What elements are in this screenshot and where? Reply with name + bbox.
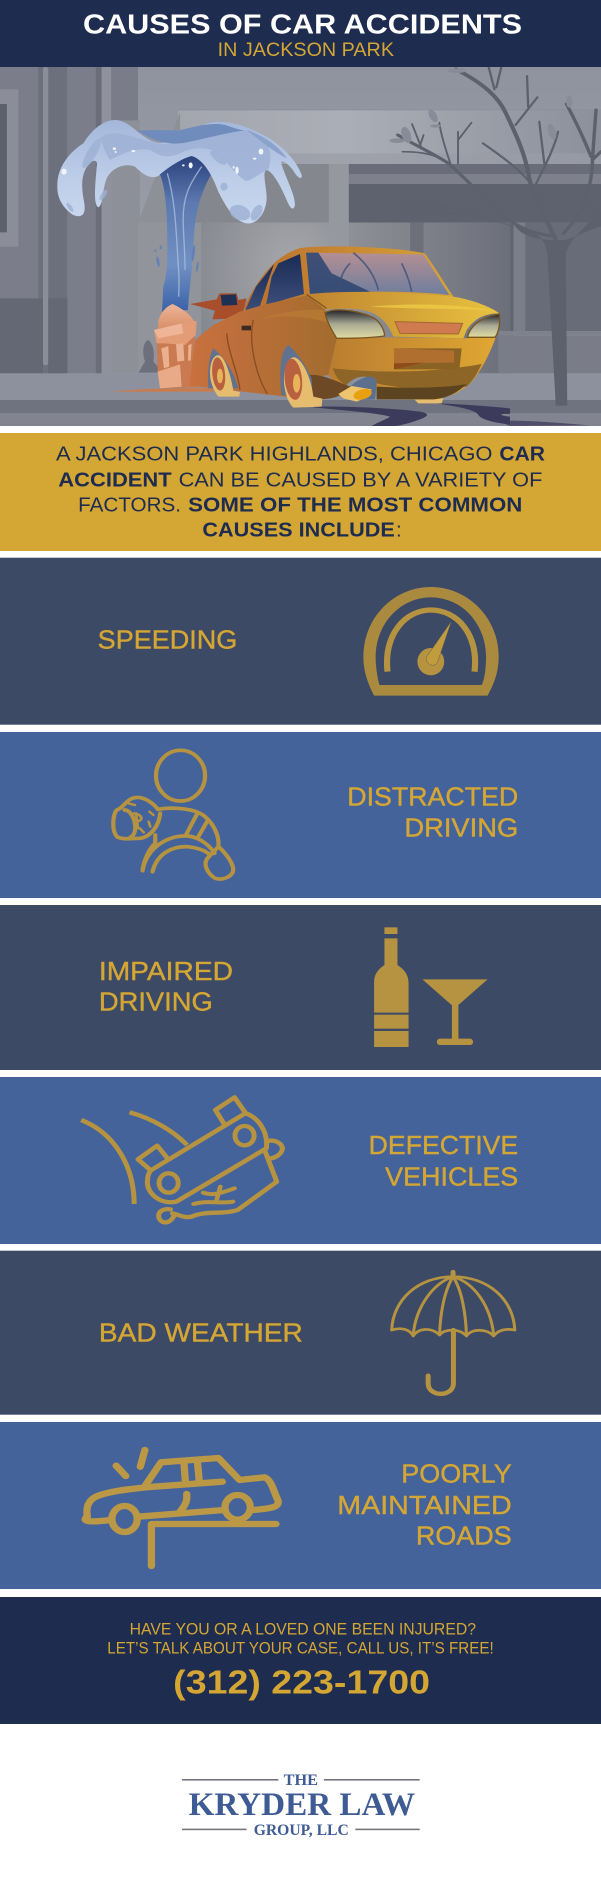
call to action text [107,1620,494,1658]
crashed orange car [189,246,590,426]
icon: bottle and martini glass [374,927,488,1047]
hero illustration: car crashed into fire hydrant [0,67,601,427]
intro text: CAUSES INCLUDE [202,519,395,542]
panel: poorly maintained roads [0,1422,601,1589]
label: distracted driving [347,782,518,843]
label: bad weather: BAD WEATHER [99,1318,303,1348]
intro text: SOME OF THE MOST COMMON [188,494,522,517]
label: defective vehicles: DEFECTIVE [369,1130,518,1160]
call to action text: LET’S TALK ABOUT YOUR CASE, CALL US, IT’S FREE! [107,1640,494,1658]
panel: bad weather [0,1251,601,1415]
label: impaired driving: IMPAIRED [99,956,233,986]
rear wheel [208,348,238,388]
label: distracted driving: DISTRACTED [347,782,518,812]
label: poorly maintained roads [337,1459,512,1551]
fire hydrant [110,304,213,392]
panel: speeding [0,558,601,725]
title: CAUSES OF CAR ACCIDENTS [83,8,522,39]
intro text: CAR [499,443,545,466]
phone number: (312) 223-1700 [173,1663,430,1700]
call to action panel [0,1597,601,1724]
label: speeding: SPEEDING [98,624,237,654]
label: poorly maintained roads: MAINTAINED [337,1490,512,1520]
intro text [56,443,545,542]
intro text: : [396,519,402,542]
icon: overturned car [81,1097,282,1222]
front wheel [280,345,313,397]
call to action text: HAVE YOU OR A LOVED ONE BEEN INJURED? [130,1620,476,1638]
header panel [0,0,601,67]
logo: The Kryder Law Group, LLC: GROUP, LLC [254,1822,349,1839]
label: distracted driving: DRIVING [404,813,518,843]
icon: speedometer [363,587,499,696]
label: defective vehicles [369,1130,518,1192]
logo: The Kryder Law Group, LLC: KRYDER LAW [189,1787,415,1823]
water jet from hydrant [57,120,302,312]
street background [0,67,601,427]
skid marks [313,403,590,426]
label: impaired driving [99,956,233,1017]
bare tree [389,67,601,406]
label: impaired driving: DRIVING [99,987,213,1017]
icon: driver eating at the wheel [113,750,233,879]
intro text: FACTORS. [78,494,181,517]
intro panel [0,433,601,551]
intro text: A JACKSON PARK HIGHLANDS, CHICAGO [56,443,492,466]
logo: The Kryder Law Group, LLC: THE [284,1772,318,1789]
label: poorly maintained roads: ROADS [416,1521,512,1551]
water crown [57,120,302,224]
panel: impaired driving [0,905,601,1070]
subtitle: IN JACKSON PARK [218,39,394,61]
intro text: CAN BE CAUSED BY A VARIETY OF [179,469,542,492]
icon: umbrella [392,1272,515,1394]
label: defective vehicles: VEHICLES [385,1162,518,1192]
label: poorly maintained roads: POORLY [401,1459,512,1489]
icon: car on broken road [85,1450,278,1566]
panel: defective vehicles [0,1077,601,1244]
logo: The Kryder Law Group, LLC [182,1772,420,1839]
panel: distracted driving [0,732,601,898]
intro text: ACCIDENT [58,469,172,492]
